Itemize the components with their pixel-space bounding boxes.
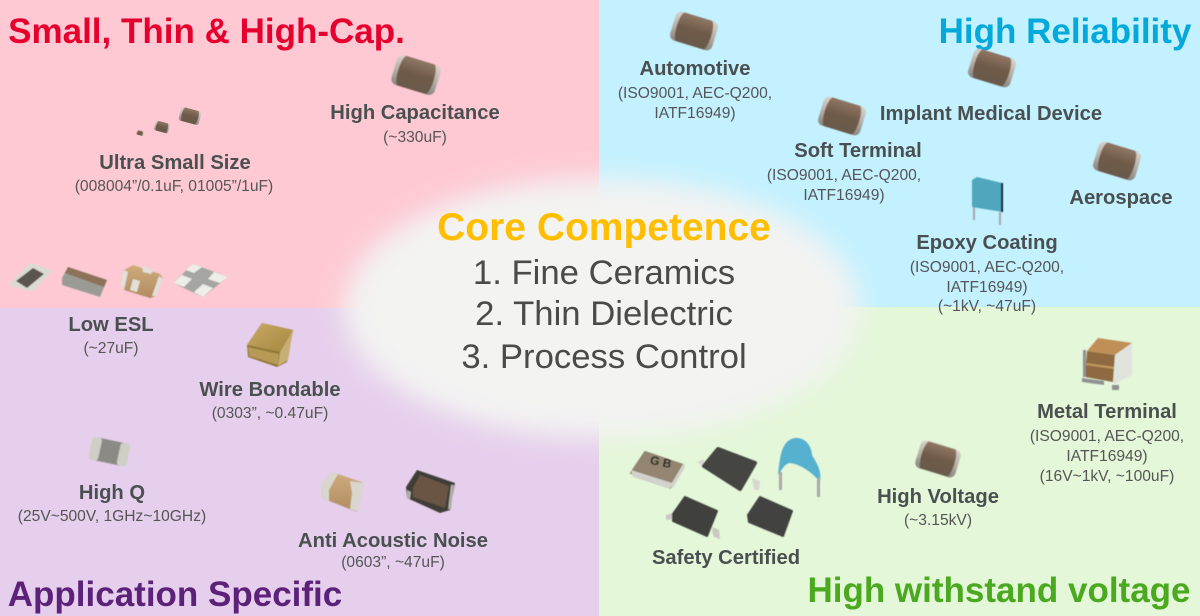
label: Anti Acoustic Noise: (0603”, ~47uF) xyxy=(341,554,445,571)
label: High Voltage xyxy=(877,486,999,529)
label: Metal Terminal: (ISO9001, AEC-Q200, xyxy=(1030,428,1184,445)
label: Epoxy Coating xyxy=(910,232,1064,315)
icon: low ESL chips xyxy=(8,263,228,298)
panel: high withstand voltage background xyxy=(599,307,1200,616)
icon: high Q chip xyxy=(88,436,131,467)
label: Ultra Small Size: (008004”/0.1uF, 01005”/1uF) xyxy=(75,178,273,195)
heading: High withstand voltage: High withstand voltage xyxy=(807,571,1191,610)
icon: implant medical chip xyxy=(967,47,1017,89)
label: Ultra Small Size: Ultra Small Size xyxy=(99,152,251,174)
label: Soft Terminal: Soft Terminal xyxy=(794,140,922,162)
heading: High Reliability: High Reliability xyxy=(939,12,1192,51)
icon: aerospace chip xyxy=(1092,140,1142,182)
label: Ultra Small Size xyxy=(75,152,273,195)
heading: Application Specific: Application Specific xyxy=(8,575,342,614)
icon: wire bondable chip xyxy=(247,323,293,367)
label: High Voltage: High Voltage xyxy=(877,486,999,508)
label: Epoxy Coating: Epoxy Coating xyxy=(916,232,1058,254)
label: Safety Certified: Safety Certified xyxy=(652,547,800,569)
panel: small thin high-cap background xyxy=(0,0,600,308)
icon: epoxy coating capacitor xyxy=(972,177,1003,225)
icon: ultra small chips xyxy=(136,107,202,136)
core competence block xyxy=(437,206,771,376)
label: Epoxy Coating: (ISO9001, AEC-Q200, xyxy=(910,259,1064,276)
icon: anti acoustic noise chips xyxy=(321,470,455,513)
label: Automotive xyxy=(618,58,772,122)
label: Epoxy Coating: IATF16949) xyxy=(946,279,1028,296)
label: Wire Bondable xyxy=(199,379,341,422)
label: Low ESL: (~27uF) xyxy=(83,340,139,357)
icon: high voltage chip xyxy=(914,439,962,479)
label: Metal Terminal xyxy=(1030,401,1184,485)
panel: high reliability background xyxy=(599,0,1200,307)
label: Soft Terminal: IATF16949) xyxy=(803,187,885,204)
label: Aerospace: Aerospace xyxy=(1069,187,1173,209)
icon: metal terminal chip xyxy=(1082,338,1132,390)
icon: automotive chip xyxy=(669,10,719,52)
label: High Q: High Q xyxy=(79,482,145,504)
label: Anti Acoustic Noise xyxy=(298,530,488,571)
panel: application specific background xyxy=(0,308,599,616)
label: High Q: (25V~500V, 1GHz~10GHz) xyxy=(18,508,206,525)
icon: soft terminal chip xyxy=(817,95,867,137)
icon: safety certified components xyxy=(631,438,820,539)
item 2: 2. Thin Dielectric xyxy=(475,295,733,333)
icon: safety certified components: G B xyxy=(649,453,673,471)
label: Metal Terminal: Metal Terminal xyxy=(1037,401,1177,423)
label: Automotive: Automotive xyxy=(639,58,751,80)
icon: high capacitance chip xyxy=(390,54,442,96)
label: Wire Bondable: Wire Bondable xyxy=(199,379,341,401)
label: Soft Terminal: (ISO9001, AEC-Q200, xyxy=(767,167,921,184)
label: High Q xyxy=(18,482,206,525)
label: High Capacitance: High Capacitance xyxy=(330,102,500,124)
label: High Capacitance xyxy=(330,102,500,146)
label: High Voltage: (~3.15kV) xyxy=(904,512,972,529)
label: Anti Acoustic Noise: Anti Acoustic Noise xyxy=(298,530,488,552)
label: Epoxy Coating: (~1kV, ~47uF) xyxy=(938,298,1036,315)
label: Low ESL xyxy=(68,314,154,357)
label: Wire Bondable: (0303”, ~0.47uF) xyxy=(212,405,328,422)
center glow ellipse xyxy=(344,178,860,438)
label: Automotive: IATF16949) xyxy=(654,105,736,122)
label: Metal Terminal: IATF16949) xyxy=(1066,448,1148,465)
label: Metal Terminal: (16V~1kV, ~100uF) xyxy=(1040,468,1174,485)
label: Automotive: (ISO9001, AEC-Q200, xyxy=(618,85,772,102)
label: Implant Medical Device: Implant Medical Device xyxy=(880,103,1102,125)
item 3: 3. Process Control xyxy=(461,338,747,376)
label: High Capacitance: (~330uF) xyxy=(383,129,447,146)
item 1: 1. Fine Ceramics xyxy=(473,254,735,292)
label: Soft Terminal xyxy=(767,140,922,204)
core competence heading: Core Competence xyxy=(437,206,771,249)
heading: Small, Thin & High-Cap.: Small, Thin & High-Cap. xyxy=(8,12,405,51)
label: Low ESL: Low ESL xyxy=(68,314,154,336)
